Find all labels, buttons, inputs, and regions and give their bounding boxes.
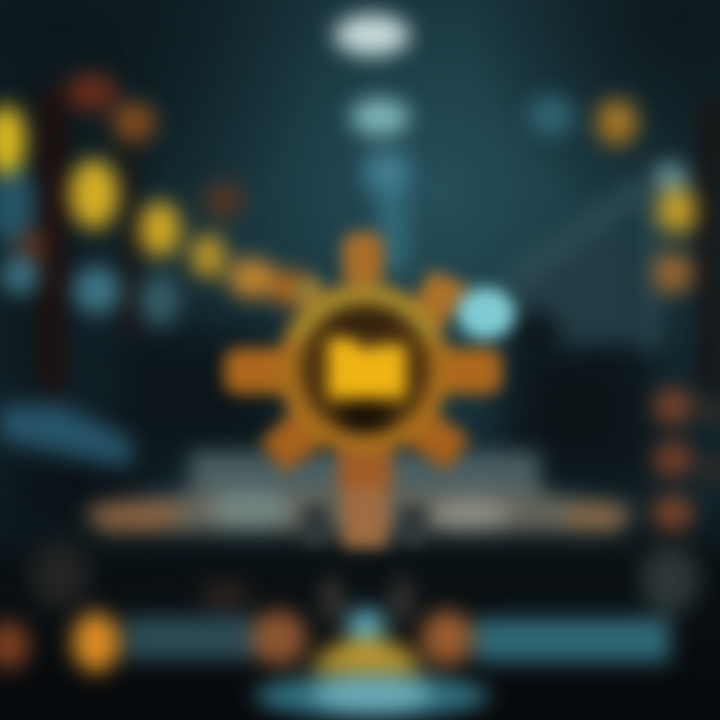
left row of yellow lamps (0, 73, 310, 306)
left machine with blue highlight (0, 405, 135, 468)
right dark machine (516, 311, 560, 359)
platform column below gear (342, 488, 388, 548)
gear body (278, 282, 450, 454)
bottom centre pool with gold arc (254, 608, 490, 718)
top-centre ceiling lights (334, 14, 410, 270)
gear icon (224, 232, 515, 548)
lower teal floor (30, 541, 700, 662)
central platform (87, 452, 630, 532)
lower orange lamps (0, 610, 473, 672)
glowing cyan light right of gear (457, 287, 515, 339)
broad dark shading (0, 60, 655, 530)
right structure: pillars and beams (500, 95, 720, 390)
dark inner ring (300, 304, 430, 434)
left structure: pillars and beams (0, 90, 180, 390)
gear teeth (342, 232, 384, 284)
glowing core (328, 338, 406, 398)
right column of lamps (596, 99, 720, 530)
